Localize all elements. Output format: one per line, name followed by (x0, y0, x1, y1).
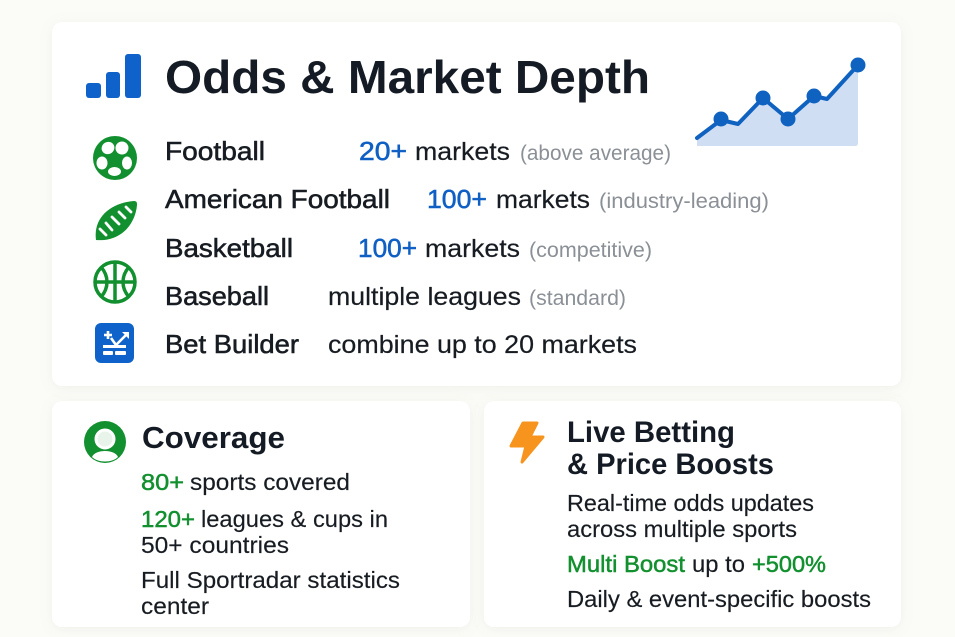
row: baseball: Baseball (165, 281, 269, 311)
row: basketball (165, 233, 652, 263)
text block: leagues: leagues & cups in (201, 506, 388, 532)
row: football: 20+ (359, 136, 407, 166)
heading: Coverage (142, 420, 285, 455)
icon: football (93, 136, 137, 180)
text block: leagues (141, 506, 388, 558)
text block: multi boost: +500% (752, 551, 826, 577)
title: Odds & Market Depth (165, 51, 650, 103)
text block: sports: 80+ (141, 469, 184, 495)
panel: odds and market depth (52, 22, 901, 386)
row: football: markets (415, 138, 510, 166)
heading: Live Betting (567, 416, 735, 449)
row: basketball: (competitive) (529, 239, 652, 262)
icon: signal bars (86, 54, 141, 98)
text block: real-time odds (567, 490, 814, 542)
icon: basketball (95, 262, 135, 302)
row: american football (165, 184, 769, 214)
panel: coverage (52, 401, 470, 627)
text block: sports: sports covered (190, 469, 350, 495)
text block: daily boosts: Daily & event-specific boosts (567, 586, 871, 612)
row: american football: (industry-leading) (599, 190, 769, 213)
row: football: (above average) (520, 142, 671, 165)
row: bet builder (165, 329, 637, 359)
row: basketball: markets (425, 235, 520, 263)
icon: lightning bolt (511, 423, 543, 462)
text block: leagues: 120+ (141, 506, 195, 532)
text block: multi boost: Multi Boost (567, 551, 685, 577)
text block: statistics: Full Sportradar statistics (141, 567, 400, 593)
panel: live betting (484, 401, 901, 627)
text block: multi boost: up to (692, 551, 745, 577)
row: baseball: multiple leagues (328, 283, 521, 311)
line chart (697, 58, 866, 146)
row: basketball: Basketball (165, 233, 293, 263)
text block: statistics: center (141, 593, 209, 619)
row: basketball: 100+ (358, 233, 417, 263)
text block: multi boost (567, 551, 826, 577)
row: football: Football (165, 136, 265, 166)
text block: real-time odds: Real-time odds updates (567, 490, 814, 516)
row: american football: 100+ (427, 184, 487, 214)
row: american football: American Football (165, 184, 390, 214)
icon: user (84, 421, 126, 463)
text block: leagues: 50+ countries (141, 532, 289, 558)
row: baseball (165, 281, 626, 311)
text block: real-time odds: across multiple sports (567, 516, 797, 542)
heading (567, 416, 774, 481)
row: football (165, 136, 671, 166)
text block: statistics (141, 567, 400, 619)
row: bet builder: Bet Builder (165, 329, 299, 359)
row: baseball: (standard) (529, 287, 626, 310)
icon: bet builder (95, 323, 134, 363)
row: american football: markets (496, 186, 590, 214)
row: bet builder: combine up to 20 markets (328, 331, 637, 359)
icon: american football (96, 201, 137, 240)
heading: & Price Boosts (567, 448, 774, 481)
